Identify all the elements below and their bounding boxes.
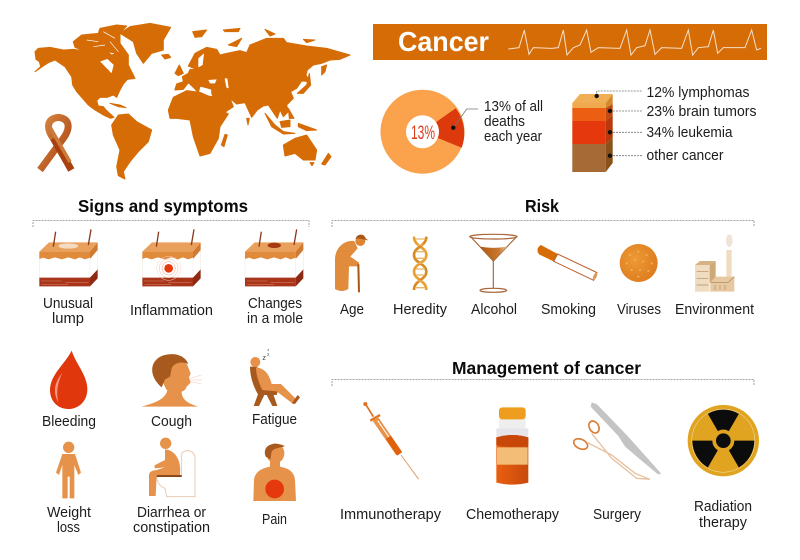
label: smoking: Smoking — [541, 302, 596, 318]
pie percent: 13% — [411, 123, 435, 144]
icon: chemotherapy bottle — [496, 407, 528, 485]
pie chart — [380, 90, 478, 174]
label: weight loss: loss — [57, 520, 80, 536]
icon: unusual lump — [39, 229, 98, 286]
stacked bar labels: 23% brain tumors — [646, 104, 756, 120]
icon: age — [335, 235, 368, 292]
stacked bar labels — [646, 85, 756, 164]
label: diarrhea or constipation: Diarrhea or — [137, 505, 206, 521]
label: fatigue: Fatigue — [252, 412, 297, 428]
sleep letters: z — [267, 348, 269, 352]
South America — [112, 114, 152, 179]
icon: immunotherapy syringe — [363, 402, 419, 479]
stacked bar labels: other cancer — [646, 148, 724, 164]
label: heredity: Heredity — [393, 302, 448, 318]
stacked bar labels: 34% leukemia — [646, 125, 733, 141]
stacked bar chart — [572, 91, 642, 172]
label: viruses: Viruses — [617, 302, 661, 318]
Arctic islands block — [73, 25, 128, 60]
stacked bar labels: 12% lymphomas — [646, 85, 750, 101]
label: radiation therapy — [694, 499, 752, 531]
icon: viruses — [620, 244, 658, 282]
pie caption: deaths — [484, 114, 525, 130]
pie caption: each year — [484, 129, 542, 145]
Southeast Asia islands — [247, 108, 317, 134]
icon: smoking — [537, 245, 598, 281]
label: cough: Cough — [151, 414, 192, 430]
label: age: Age — [340, 302, 364, 318]
label: chemotherapy: Chemotherapy — [466, 507, 560, 523]
label: changes in a mole: in a mole — [247, 311, 303, 327]
label: immunotherapy: Immunotherapy — [340, 507, 442, 523]
Iceland and UK — [175, 30, 207, 76]
label: unusual lump: Unusual — [43, 296, 93, 312]
label: pain: Pain — [262, 512, 287, 528]
icon: radiation — [688, 405, 759, 476]
heading: management of cancer: Management of cancer — [452, 358, 641, 378]
heading: risk: Risk — [525, 196, 559, 216]
Greenland — [120, 23, 171, 63]
icon: environment — [695, 234, 734, 292]
icon: pain — [253, 443, 296, 501]
label: diarrhea or constipation: constipation — [133, 520, 210, 536]
icon: diarrhea or constipation — [149, 438, 195, 497]
label: unusual lump: lump — [52, 311, 84, 327]
Caribbean — [110, 103, 126, 108]
label: surgery: Surgery — [593, 507, 642, 523]
label: weight loss — [47, 505, 91, 536]
pie caption: 13% of all — [484, 99, 543, 115]
label: radiation therapy: Radiation — [694, 499, 752, 515]
icon: changes in a mole — [245, 229, 303, 286]
label: changes in a mole: Changes — [248, 296, 302, 312]
icon: alcohol — [470, 234, 517, 292]
pie caption — [484, 99, 543, 145]
icon: weight loss — [56, 442, 81, 498]
label: alcohol: Alcohol — [471, 302, 517, 318]
label: bleeding: Bleeding — [42, 414, 96, 430]
icon: bleeding — [50, 351, 87, 409]
title: Cancer — [398, 26, 489, 57]
sleep letters — [262, 348, 270, 362]
label: changes in a mole — [247, 296, 303, 327]
icon: awareness ribbon — [40, 117, 71, 170]
label: environment: Environment — [675, 302, 754, 318]
world map — [35, 23, 350, 179]
Africa — [168, 91, 228, 156]
sleep letters: z — [267, 352, 270, 358]
icon: fatigue — [250, 348, 300, 406]
label: radiation therapy: therapy — [699, 515, 748, 531]
Australia — [283, 135, 317, 160]
sleep letters: z — [262, 353, 266, 362]
heading: signs and symptoms: Signs and symptoms — [78, 196, 248, 216]
North America — [35, 47, 135, 118]
banner — [373, 24, 767, 60]
label: weight loss: Weight — [47, 505, 91, 521]
label: diarrhea or constipation — [133, 505, 210, 536]
icon: heredity — [414, 237, 426, 290]
Eurasia — [175, 38, 350, 118]
icon: cough — [141, 354, 202, 407]
label: inflammation: Inflammation — [130, 303, 213, 319]
icon: surgery tools — [572, 402, 661, 479]
heartbeat line — [508, 30, 761, 55]
icon: inflammation — [142, 229, 201, 286]
label: unusual lump — [43, 296, 93, 327]
